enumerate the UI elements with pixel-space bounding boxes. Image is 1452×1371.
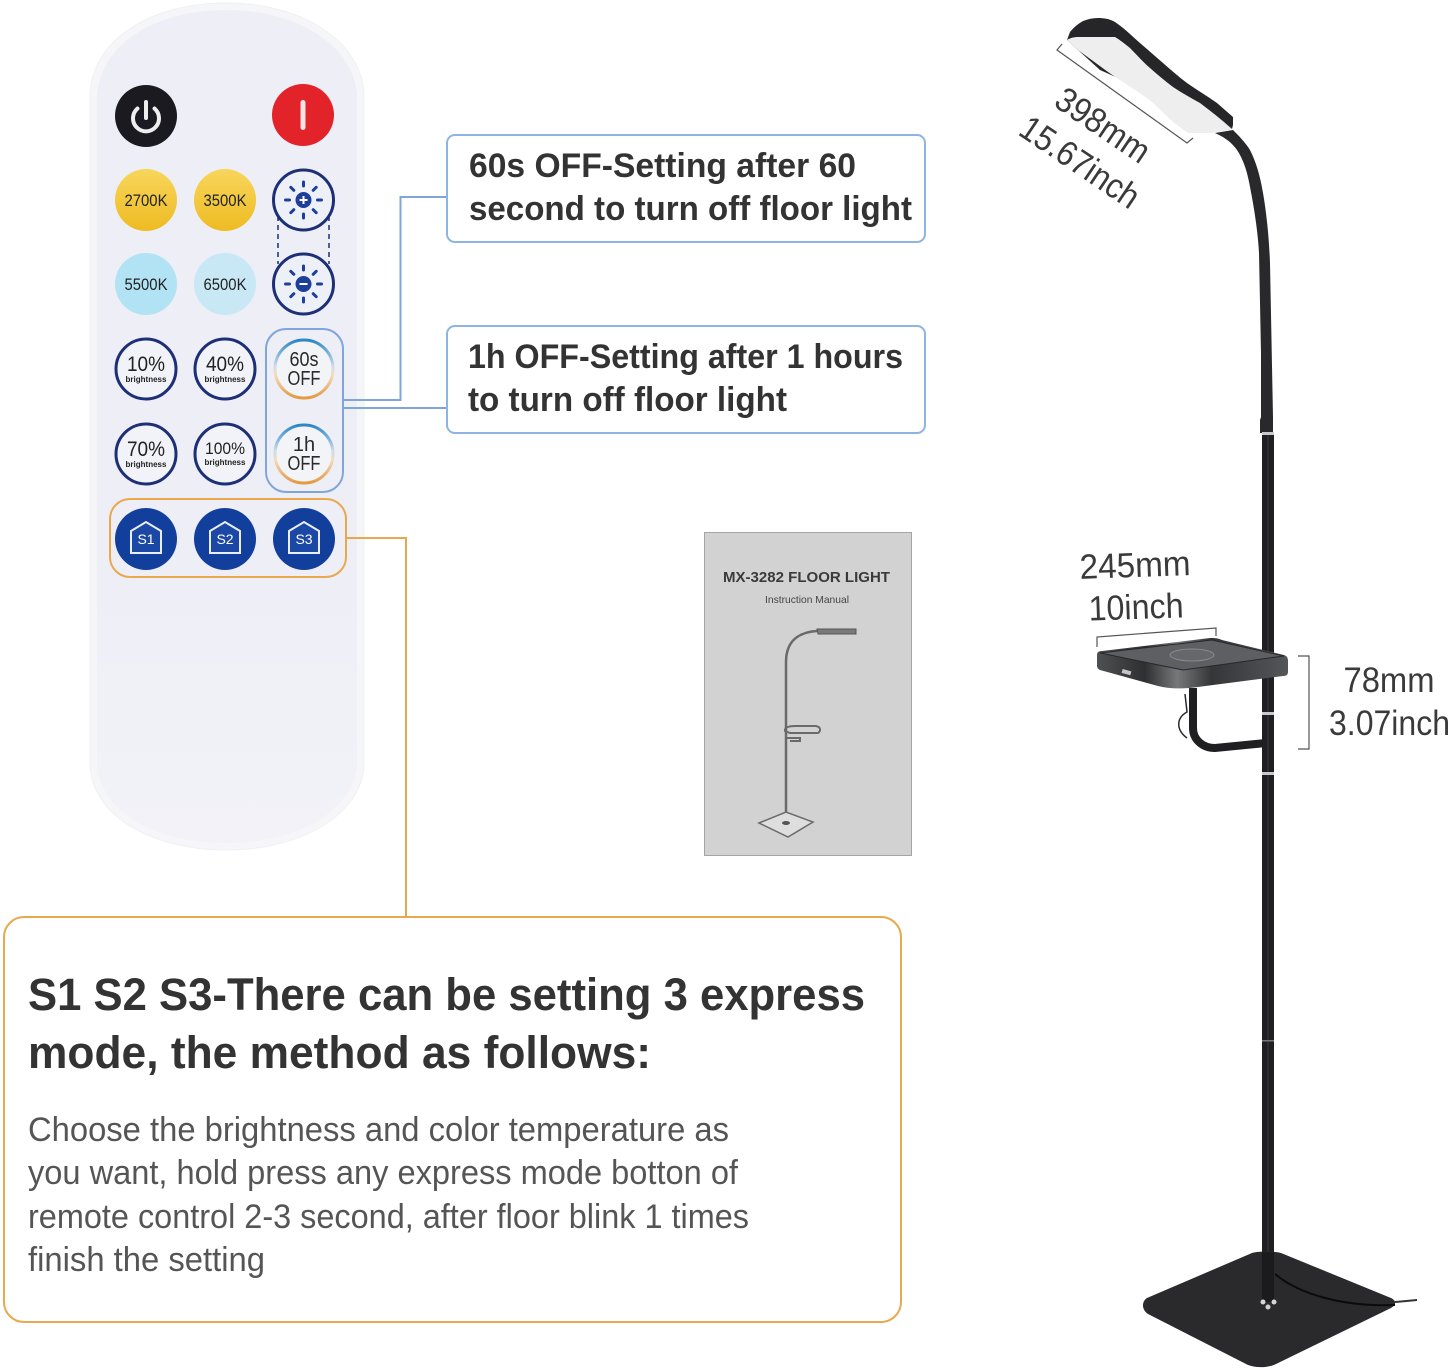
dimension: lamp head width: 398mm <box>1048 80 1158 171</box>
heading: express mode <box>28 969 865 1078</box>
dimension: shelf width <box>1079 544 1216 647</box>
shelf cable <box>1179 694 1187 738</box>
button: 70% brightness <box>116 424 176 484</box>
button: 70% brightness: 70% <box>127 438 165 461</box>
button: brightness up <box>274 170 334 230</box>
button: 100% brightness: brightness <box>205 458 246 467</box>
callout: 1h off: to turn off floor light <box>468 381 787 419</box>
button: 60s off: 60s <box>290 349 318 371</box>
button: S1 <box>115 508 177 570</box>
text: express mode method: remote control 2-3 second, after floor blink 1 times <box>28 1198 749 1236</box>
button: 2700K <box>115 169 177 231</box>
button: S3 <box>273 508 335 570</box>
dimension: lamp head width <box>1012 44 1193 217</box>
callout: 1h off <box>447 326 925 433</box>
callout: 60s off <box>447 135 925 242</box>
button: 1h off: 1h <box>293 434 315 456</box>
highlight: express buttons outline <box>110 499 346 577</box>
lamp head <box>1067 18 1233 133</box>
button: 100% brightness: 100% <box>205 439 245 458</box>
button: 6500K <box>194 253 256 315</box>
callout: 60s off: second to turn off floor light <box>469 190 912 228</box>
button: 5500K: 5500K <box>124 275 168 294</box>
dimension: shelf height <box>1298 656 1450 749</box>
button: 40% brightness: 40% <box>206 353 244 376</box>
button: 40% brightness: brightness <box>205 375 246 384</box>
button: S3: S3 <box>295 531 313 547</box>
dimension: lamp head width: 15.67inch <box>1012 108 1147 217</box>
button: 1h off: OFF <box>288 453 320 475</box>
instruction manual: MX-3282 FLOOR LIGHT <box>723 570 890 586</box>
button: 10% brightness <box>116 339 176 399</box>
button: 5500K <box>115 253 177 315</box>
heading: express mode: mode, the method as follows: <box>28 1027 651 1078</box>
instruction manual <box>704 532 912 856</box>
callout: 60s off: 60s OFF-Setting after 60 <box>469 147 856 185</box>
connector: 1h callout <box>343 407 447 409</box>
text: express mode method: you want, hold press any express mode botton of <box>28 1154 739 1192</box>
button: 10% brightness: brightness <box>126 375 167 384</box>
button: red off <box>272 84 334 146</box>
dimension: shelf width: 245mm <box>1079 544 1191 587</box>
button: 10% brightness: 10% <box>127 353 165 376</box>
shelf <box>1097 638 1288 688</box>
button: power <box>115 85 177 147</box>
connector: 60s callout <box>343 197 447 400</box>
button: 40% brightness <box>195 339 255 399</box>
button: S2: S2 <box>216 531 234 547</box>
lamp pole rings <box>1262 432 1274 1042</box>
button: 2700K: 2700K <box>124 191 168 210</box>
lamp base <box>1143 1252 1417 1367</box>
text: express mode method <box>28 1111 749 1279</box>
button: 60s off: OFF <box>288 368 320 390</box>
lamp pole <box>1262 433 1274 1303</box>
highlight: timer buttons outline <box>266 329 343 492</box>
button: 60s off <box>275 340 333 398</box>
panel: express mode instructions <box>4 917 901 1322</box>
dimension: shelf height: 78mm <box>1344 661 1434 700</box>
shelf bracket <box>1193 688 1266 748</box>
lamp neck <box>1215 130 1273 433</box>
connector: express callout <box>346 538 406 917</box>
button: 3500K <box>194 169 256 231</box>
text: express mode method: Choose the brightness and color temperature as <box>28 1111 729 1149</box>
button: 6500K: 6500K <box>204 275 247 294</box>
button: 70% brightness: brightness <box>126 460 167 469</box>
button: 3500K: 3500K <box>204 191 247 210</box>
manual lamp drawing <box>759 629 856 837</box>
text: express mode method: finish the setting <box>28 1241 265 1279</box>
button: 1h off <box>275 425 333 483</box>
dashed brightness link <box>278 216 329 264</box>
floor lamp <box>1067 18 1417 1367</box>
button: 100% brightness <box>195 424 255 484</box>
dimension: shelf width: 10inch <box>1088 586 1184 629</box>
button: S2 <box>194 508 256 570</box>
button: S1: S1 <box>137 531 155 547</box>
remote control <box>90 3 364 850</box>
heading: express mode: S1 S2 S3-There can be setting 3 express <box>28 969 865 1020</box>
button: brightness down <box>274 254 334 314</box>
callout: 1h off: 1h OFF-Setting after 1 hours <box>468 338 903 376</box>
instruction manual: Instruction Manual <box>765 594 849 606</box>
